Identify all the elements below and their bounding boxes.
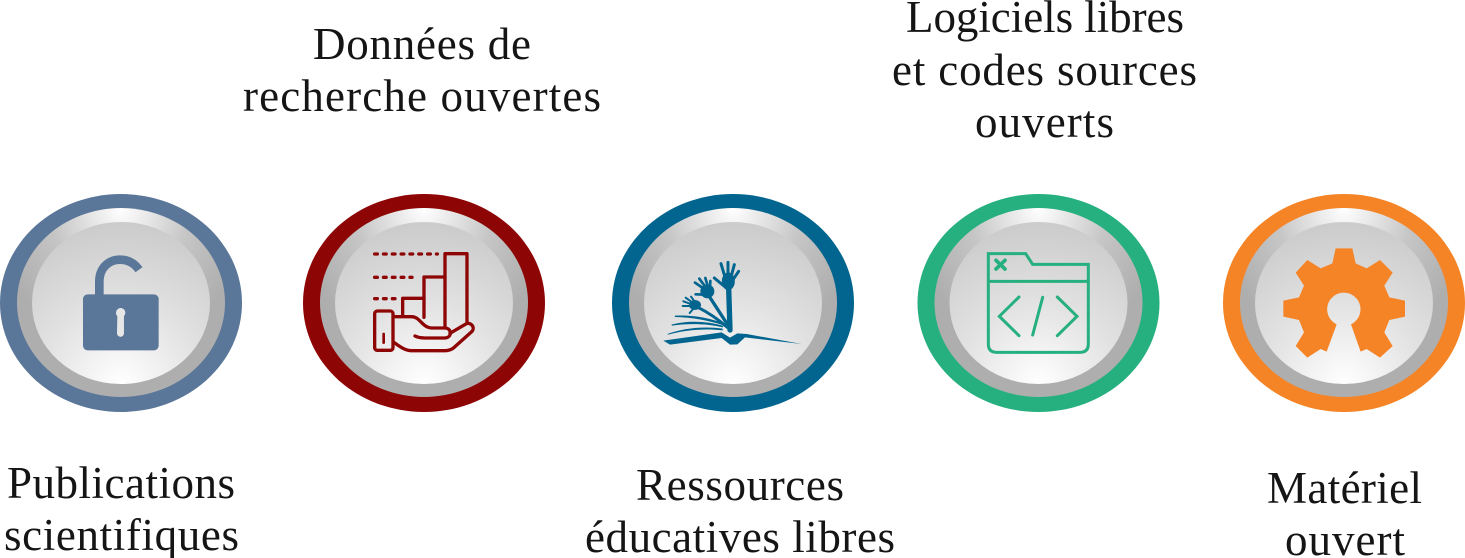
label: Matériel ouvert <box>1267 463 1422 558</box>
icon: open source hardware gear <box>1283 248 1405 358</box>
medium hand <box>695 278 713 297</box>
badge: blue ring <box>0 194 242 412</box>
label: Logiciels libres et codes sources ouverts: ouverts <box>975 97 1114 147</box>
label: Données de recherche ouvertes: recherche ouvertes <box>243 71 601 121</box>
badge: orange ring <box>1223 194 1465 412</box>
label: Publications scientifiques <box>4 458 239 558</box>
icon: code window folder <box>988 254 1088 352</box>
arms <box>697 287 730 330</box>
label: Logiciels libres et codes sources ouverts <box>892 0 1197 147</box>
badge: teal-blue ring <box>612 194 854 412</box>
label: Données de recherche ouvertes: Données de <box>313 19 531 69</box>
item 2: données de recherche ouvertes <box>243 19 601 412</box>
large hand <box>714 262 739 289</box>
item 1: publications scientifiques <box>0 194 242 558</box>
item 4: logiciels libres <box>892 0 1197 412</box>
badge: green ring <box>918 194 1160 412</box>
small hand <box>683 297 700 313</box>
icon: hand holding bar chart <box>375 254 473 351</box>
icon: open padlock <box>83 260 159 350</box>
label: Ressources éducatives libres <box>585 460 895 558</box>
label: Ressources éducatives libres: Ressources <box>636 460 844 510</box>
badge: red ring <box>303 194 545 412</box>
label: Logiciels libres et codes sources ouverts: et codes sources <box>892 45 1197 95</box>
label: Publications scientifiques: Publications <box>7 458 235 508</box>
label: Matériel ouvert: Matériel <box>1267 463 1422 513</box>
book pages <box>663 315 802 345</box>
label: Données de recherche ouvertes <box>243 19 601 121</box>
item 5: matériel ouvert <box>1223 194 1465 558</box>
item 3: ressources éducatives libres <box>585 194 895 558</box>
icon: open book with raised hands <box>663 262 802 345</box>
